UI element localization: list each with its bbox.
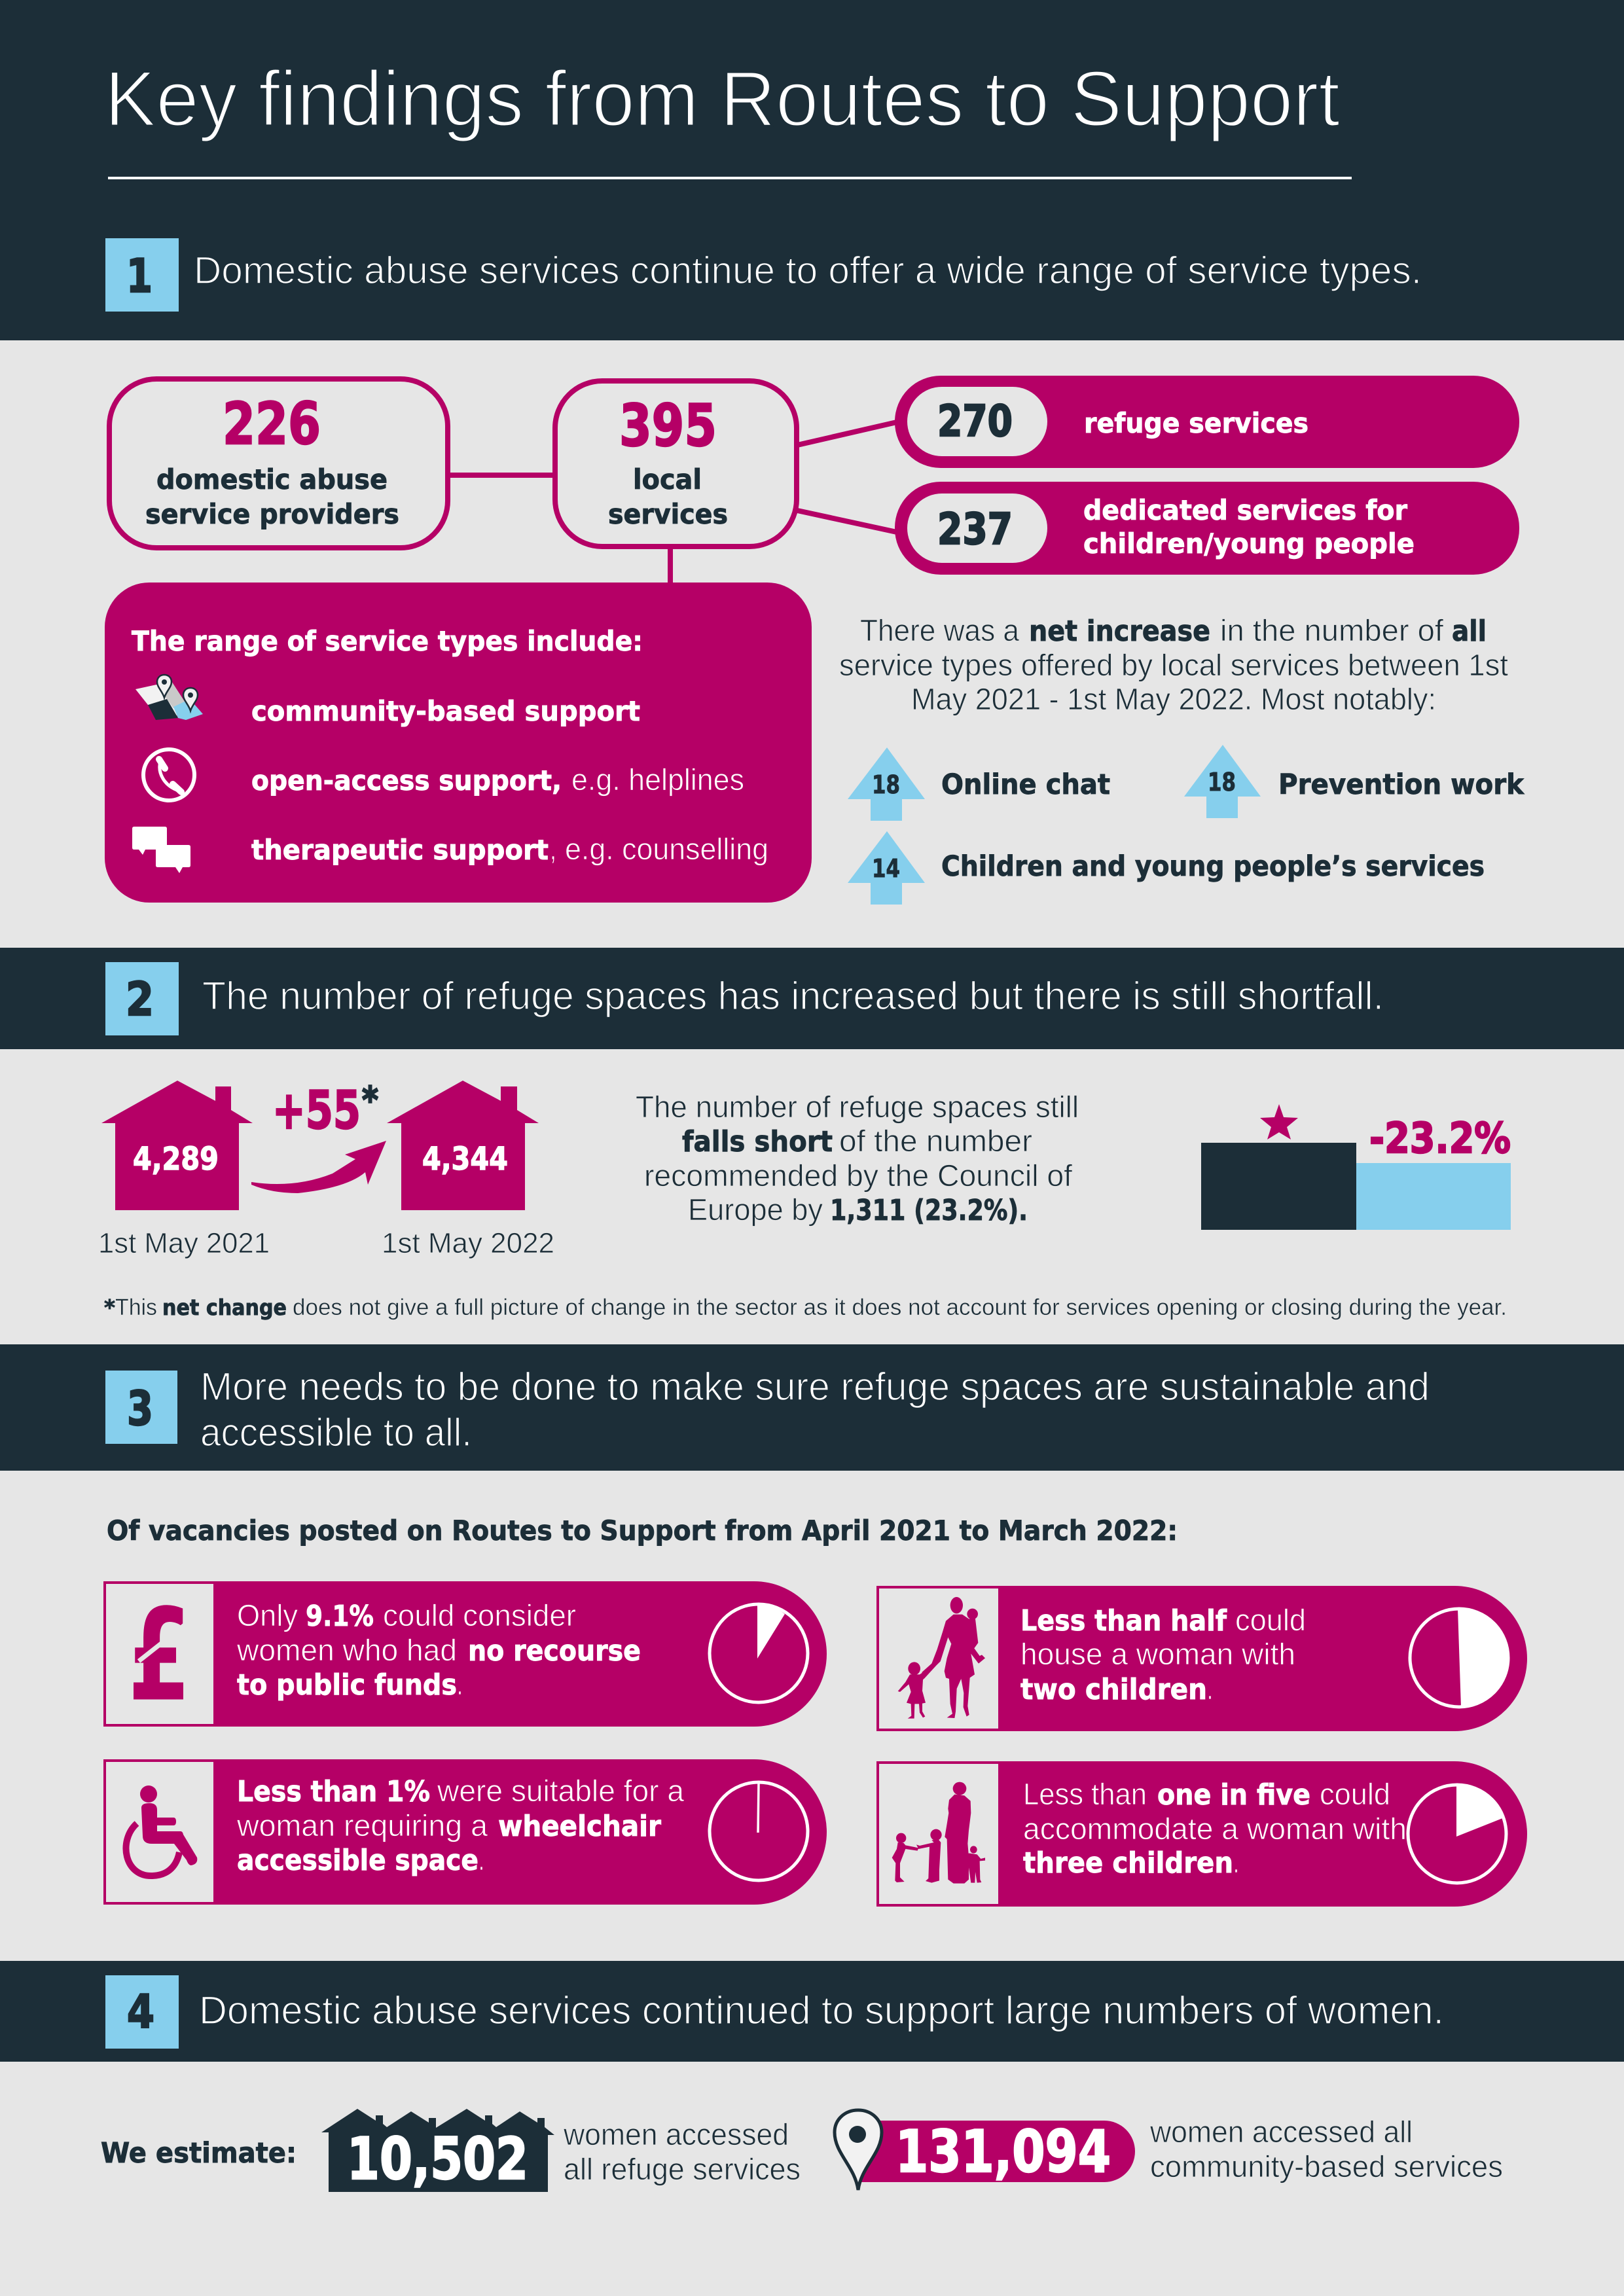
service: open-access support [251, 762, 744, 797]
badge: 131,094 with pin [835, 2110, 1135, 2190]
pill: 237 dedicated services: children/young people [1083, 528, 1415, 560]
text block: net increase: net increase [1029, 615, 1210, 648]
house: 4,344 in 2022 [387, 1081, 539, 1210]
section 4 heading: Domestic abuse services continued to support large numbers of women. [199, 1988, 1444, 2032]
up arrow: prevention work +18 [1184, 745, 1525, 818]
label: we estimate: We estimate: [101, 2137, 297, 2170]
card text [236, 1598, 641, 1702]
card text: wheelchair [498, 1810, 661, 1843]
up arrow: online chat +18: Online chat [941, 768, 1110, 801]
change: +55: +55 [272, 1080, 361, 1141]
icon: star [1260, 1104, 1298, 1139]
footnote: This [115, 1295, 157, 1320]
label: 1st May 2022: 1st May 2022 [382, 1227, 554, 1259]
card: wheelchair accessible [103, 1759, 827, 1905]
service: therapeutic support: therapeutic support [251, 834, 549, 866]
text block: net increase: May 2021 - 1st May 2022. Most notably: [911, 682, 1436, 716]
card: two children [876, 1586, 1527, 1731]
card text: . [1207, 1672, 1213, 1706]
footnote: * [104, 1295, 115, 1320]
card text [1020, 1603, 1306, 1706]
service: therapeutic support: e.g. counselling [565, 832, 768, 866]
card text: Less than 1% [237, 1775, 430, 1808]
text: women accessed all community-based services: women accessed all [1149, 2115, 1413, 2149]
panel heading: The range of service types include: [132, 625, 643, 657]
up arrow: online chat +18 [848, 747, 1110, 821]
service: therapeutic support [251, 832, 768, 866]
label: 1st May 2021: 1st May 2021 [98, 1227, 270, 1259]
stat box: 226 providers [109, 379, 448, 548]
text: women accessed all refuge services [563, 2117, 801, 2186]
change: +55: * [362, 1079, 378, 1122]
text: women accessed all refuge services: all refuge services [564, 2152, 801, 2186]
stat box: 226 providers: 226 [223, 390, 321, 457]
text: women accessed all community-based services: community-based services [1150, 2149, 1503, 2183]
panel: range of service types [105, 583, 812, 903]
service: therapeutic support: , [550, 832, 556, 866]
card text: Less than half [1020, 1604, 1227, 1638]
icon: woman with two children [898, 1597, 985, 1719]
text block: net increase: all [1452, 615, 1487, 648]
section 1 heading: 1 [126, 249, 153, 303]
card text: accessible space [237, 1844, 478, 1877]
house: 4,344 in 2022: 4,344 [422, 1141, 508, 1177]
stat box: 395 local services [555, 381, 797, 547]
text block: refuge spaces shortfall: 1,311 (23.2%). [830, 1194, 1028, 1227]
bar chart: shortfall [1201, 1104, 1511, 1230]
section 1 heading: Domestic abuse services continue to offer a wide range of service types. [194, 249, 1422, 292]
up arrow: prevention work +18: 18 [1208, 768, 1236, 797]
pill: 270 refuge services: refuge services [1084, 407, 1308, 439]
pill: 237 dedicated services: 237 [937, 504, 1013, 554]
arrow: curved increase [251, 1141, 386, 1193]
pie: less than 1% [710, 1782, 808, 1880]
stat box: 395 local services: local [633, 463, 702, 495]
bar chart: shortfall: -23.2% [1369, 1115, 1511, 1163]
text block: net increase: in the number of [1220, 613, 1443, 647]
card text: three children [1023, 1846, 1233, 1880]
footnote: does not give a full picture of change in the sector as it does not account for services opening or closing during the year. [293, 1295, 1507, 1320]
card text: . [478, 1842, 484, 1876]
section 4 heading [0, 1961, 1624, 2062]
pill: 237 dedicated services [895, 482, 1519, 575]
text block: refuge spaces shortfall: of the number [839, 1124, 1032, 1158]
service: open-access support: open-access support, [251, 764, 562, 797]
card text: women who had [236, 1633, 457, 1667]
up arrow: prevention work +18: Prevention work [1278, 768, 1525, 801]
icon: map pin [835, 2110, 882, 2190]
icon: map with pins [135, 675, 203, 720]
card text: could [1320, 1777, 1390, 1811]
text block: net increase: There was a [860, 613, 1019, 647]
section 4 heading: 4 [127, 1985, 154, 2039]
stat box: 226 providers: domestic abuse [156, 463, 388, 495]
title: Key findings from Routes to Support [105, 55, 1340, 143]
stat box: 395 local services: services [608, 498, 728, 530]
card text: . [1233, 1845, 1239, 1879]
text block: refuge spaces shortfall: The number of refuge spaces still [636, 1090, 1079, 1124]
pill: 237 dedicated services: dedicated services for [1083, 494, 1407, 526]
card text: accommodate a woman with [1023, 1812, 1407, 1846]
section 3 heading: More needs to be done to make sure refuge spaces are sustainable and [200, 1365, 1430, 1408]
card: no recourse to public funds [103, 1581, 827, 1729]
text block: refuge spaces shortfall: falls short [682, 1125, 833, 1158]
icon: speech bubbles [132, 827, 190, 873]
connector lines [450, 422, 897, 584]
pie: less than half [1410, 1609, 1509, 1707]
text block: net increase: service types offered by local services between 1st [839, 648, 1508, 682]
section 3 heading: 3 [127, 1381, 153, 1436]
up arrow: children and young people's services +14 [848, 831, 1485, 905]
service: open-access support: e.g. helplines [571, 762, 744, 797]
pie: less than one in five [1408, 1785, 1506, 1883]
house: 4,289 in 2021: 4,289 [133, 1141, 219, 1177]
icon: wheelchair [126, 1785, 197, 1876]
card text: were suitable for a [437, 1774, 684, 1808]
section 3 heading: accessible to all. [200, 1410, 472, 1454]
text: women accessed all community-based services [1149, 2115, 1503, 2183]
card text: Only [237, 1598, 298, 1632]
subheading: vacancies: Of vacancies posted on Routes to Support from April 2021 to March 2022: [107, 1515, 1178, 1547]
pill: 270 refuge services [895, 376, 1519, 468]
section 3 heading [0, 1344, 1624, 1471]
stat box: 226 providers: service providers [145, 498, 399, 530]
footnote: net change [162, 1295, 287, 1320]
card text [1023, 1777, 1407, 1880]
up arrow: online chat +18: 18 [872, 770, 900, 799]
section 2 heading: 2 [126, 973, 154, 1026]
stat box: 395 local services: 395 [619, 392, 717, 459]
card text: could [1235, 1603, 1306, 1637]
card text: no recourse [468, 1634, 641, 1668]
section 2 heading: The number of refuge spaces has increased but there is still shortfall. [202, 974, 1384, 1018]
card: three children [876, 1761, 1527, 1907]
text block: refuge spaces shortfall: recommended by the Council of [644, 1158, 1072, 1193]
section 2 heading [0, 948, 1624, 1049]
card text: one in five [1157, 1778, 1310, 1812]
section 1 heading [105, 238, 1422, 312]
pill: 270 refuge services: 270 [937, 396, 1013, 446]
text: women accessed all refuge services: women accessed [563, 2117, 789, 2151]
card text: 9.1% [306, 1600, 374, 1633]
card text: house a woman with [1020, 1637, 1295, 1671]
badge: 131,094 with pin: 131,094 [895, 2118, 1111, 2185]
house: 4,289 in 2021 [101, 1081, 253, 1210]
text block: net increase [839, 613, 1508, 716]
card text [236, 1774, 684, 1877]
pie: 9.1% [710, 1604, 808, 1702]
card text: to public funds [237, 1668, 457, 1702]
service: community-based support: community-based support [251, 695, 640, 727]
up arrow: children and young people's services +14: Children and young people’s services [941, 850, 1485, 883]
card text: could consider [383, 1598, 576, 1632]
card text: Less than [1023, 1777, 1147, 1811]
houses: 10,502: 10,502 [347, 2125, 528, 2193]
houses: 10,502 [321, 2109, 554, 2193]
header band [0, 0, 1624, 340]
card text: . [457, 1667, 463, 1701]
text block: refuge spaces shortfall: Europe by [688, 1193, 823, 1227]
up arrow: children and young people's services +14: 14 [872, 854, 900, 883]
card text: two children [1020, 1673, 1207, 1706]
card text: woman requiring a [236, 1808, 488, 1842]
icon: telephone [143, 749, 194, 800]
text block: refuge spaces shortfall [636, 1090, 1079, 1227]
icon: woman with three children [892, 1782, 985, 1884]
icon: crossed pound: £ [128, 1582, 190, 1729]
